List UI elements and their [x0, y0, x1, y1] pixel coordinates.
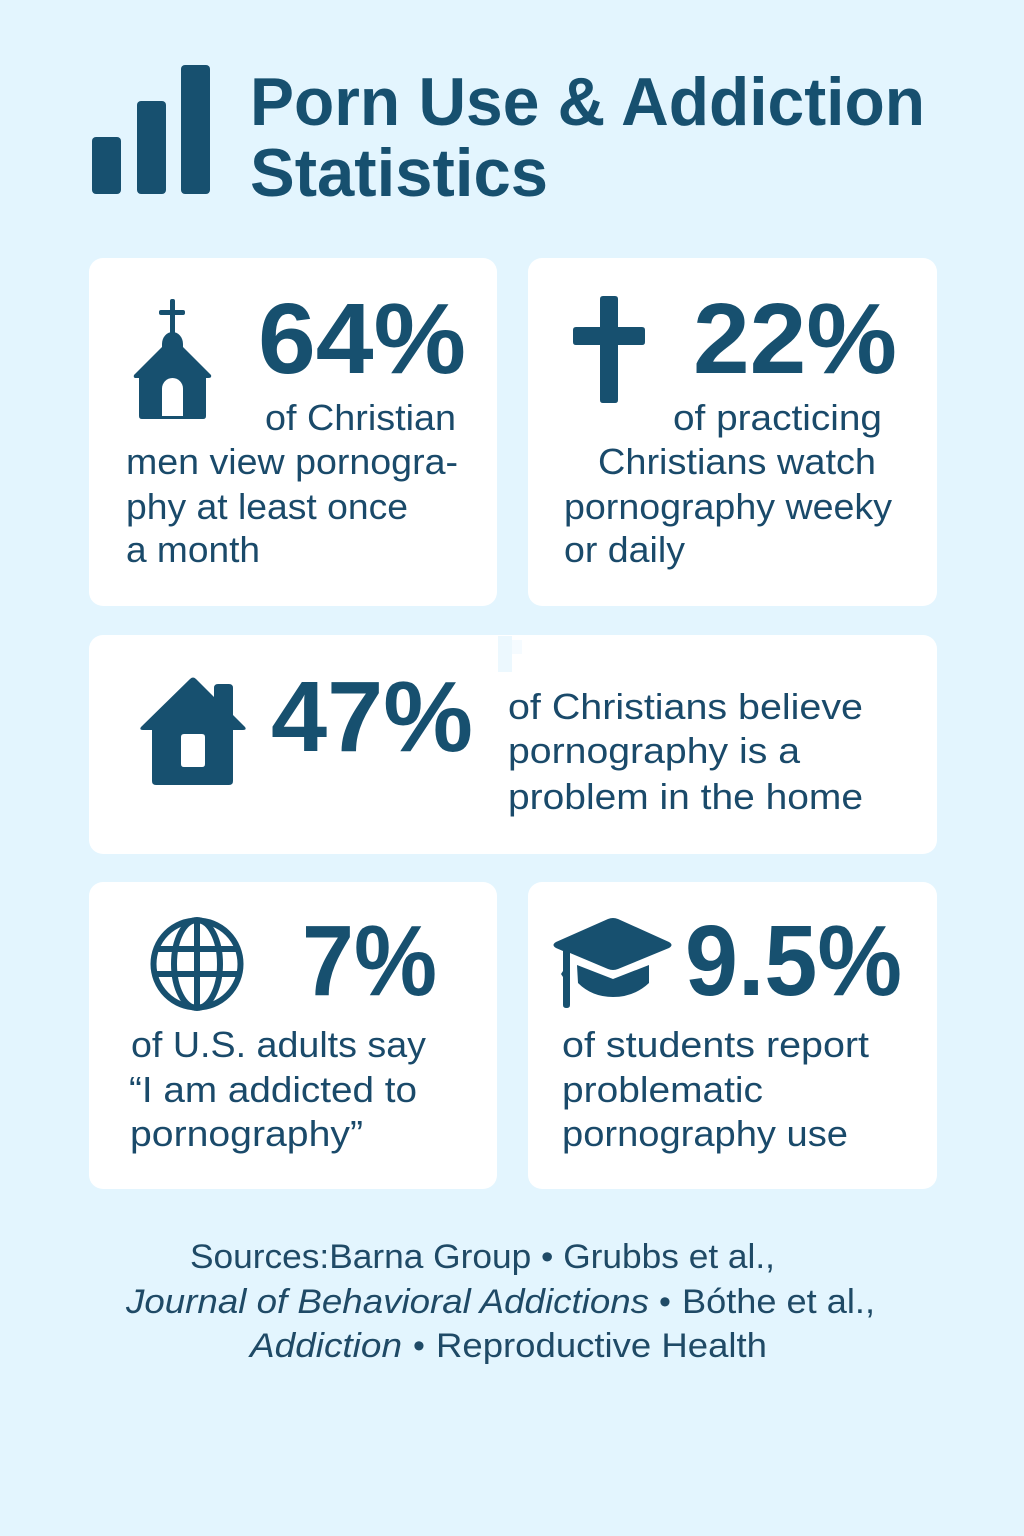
sources: Bóthe et al., — [682, 1283, 875, 1321]
icon: church — [134, 299, 211, 419]
icon: bar chart — [92, 65, 210, 194]
icon: graduation cap — [554, 918, 672, 1008]
panel: 9.5% of students — [528, 882, 937, 1189]
stat: 7%: 7% — [302, 905, 437, 1017]
description: 64%: of Christian — [265, 397, 456, 438]
panel: 7% of U.S. adults — [89, 882, 497, 1189]
description: 22%: of practicing — [673, 397, 882, 438]
title: Statistics — [250, 135, 548, 211]
description: 64%: men view pornogra- — [126, 441, 458, 482]
panel: 22% of practicing Christians — [528, 258, 937, 606]
title — [250, 64, 925, 211]
icon: house — [140, 678, 246, 785]
icon: globe — [150, 920, 244, 1008]
stat: 47%: 47% — [271, 661, 473, 773]
sources: • — [659, 1283, 671, 1321]
description: 47%: problem in the home — [508, 776, 863, 817]
title: Porn Use & Addiction — [250, 64, 925, 140]
stat: 64%: 64% — [258, 283, 466, 395]
sources: Sources:Barna Group • Grubbs et al., — [190, 1238, 775, 1276]
description: 22%: pornography weeky — [564, 486, 892, 527]
description: 22%: or daily — [564, 529, 685, 570]
description: 7%: pornography” — [130, 1113, 363, 1154]
description: 7% — [129, 1024, 426, 1154]
sources: Journal of Behavioral Addictions — [125, 1283, 649, 1321]
description: 9.5%: pornography use — [562, 1113, 848, 1154]
description: 47%: of Christians believe — [508, 686, 863, 727]
description: 22% — [564, 397, 892, 570]
sources: • — [413, 1327, 425, 1365]
description: 7%: “I am addicted to — [129, 1069, 417, 1110]
description: 64% — [126, 397, 458, 570]
panel: 47% of Christians — [89, 635, 937, 854]
description: 9.5%: of students report — [562, 1024, 869, 1065]
stat: 22%: 22% — [693, 283, 897, 395]
sources: Reproductive Health — [436, 1327, 767, 1365]
panel: 64% of Christian men — [89, 258, 497, 606]
stat: 9.5%: 9.5% — [685, 905, 902, 1017]
description: 47% — [508, 686, 863, 817]
description: 7%: of U.S. adults say — [131, 1024, 426, 1065]
description: 64%: a month — [126, 529, 260, 570]
description: 22%: Christians watch — [598, 441, 876, 482]
description: 9.5%: problematic — [562, 1069, 763, 1110]
sources — [125, 1238, 875, 1365]
sources: Addiction — [248, 1327, 402, 1365]
icon: cross — [573, 296, 645, 403]
description: 47%: pornography is a — [508, 730, 801, 771]
description: 9.5% — [562, 1024, 869, 1154]
description: 64%: phy at least once — [126, 486, 408, 527]
